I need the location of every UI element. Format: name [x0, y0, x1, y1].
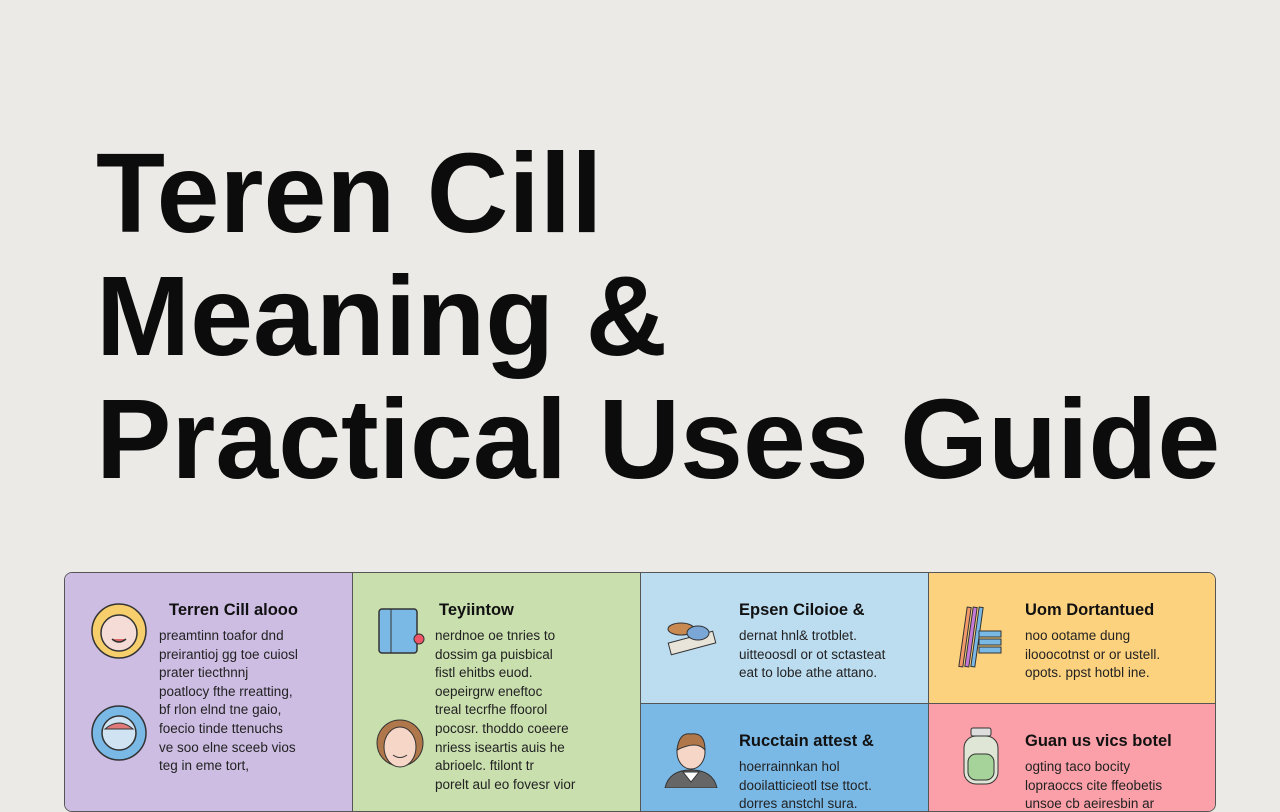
- body text: ve soo elne sceeb vios: [159, 740, 296, 755]
- body text: eat to lobe athe attano.: [739, 665, 877, 680]
- body text: [739, 759, 872, 811]
- body text: ilooocotnst or or ustell.: [1025, 647, 1160, 662]
- body text: hoerrainnkan hol: [739, 759, 840, 774]
- body text: teg in eme tort,: [159, 758, 249, 773]
- body text: uitteoosdl or ot sctasteat: [739, 647, 885, 662]
- heading: Guan us vics botel: [1025, 732, 1172, 750]
- title: Practical Uses Guide: [96, 376, 1220, 502]
- panel: orange: [929, 573, 1217, 704]
- body text: [159, 628, 298, 773]
- body text: [435, 628, 576, 792]
- icon: curly face: [376, 720, 424, 768]
- body text: dossim ga puisbical: [435, 647, 553, 662]
- body text: dorres anstchl sura.: [739, 796, 858, 811]
- icon: mouth circle: [91, 705, 147, 761]
- body text: opots. ppst hotbl ine.: [1025, 665, 1150, 680]
- body text: foecio tinde ttenuchs: [159, 721, 283, 736]
- icon: smiling face: [91, 603, 147, 659]
- body text: bf rlon elnd tne gaio,: [159, 702, 281, 717]
- heading: Uom Dortantued: [1025, 601, 1154, 619]
- body text: unsoe cb aeiresbin ar: [1025, 796, 1154, 811]
- heading: Teyiintow: [439, 601, 514, 619]
- body text: prater tiecthnnj: [159, 665, 248, 680]
- panel: green: [353, 573, 641, 812]
- icon: window: [378, 608, 424, 654]
- panel: purple: [65, 573, 353, 812]
- body text: nriess iseartis auis he: [435, 740, 565, 755]
- body text: abrioelc. ftilont tr: [435, 758, 534, 773]
- body text: [739, 628, 886, 680]
- title: Teren Cill: [96, 130, 603, 256]
- icon: man: [664, 733, 718, 788]
- body text: oepeirgrw eneftoc: [435, 684, 542, 699]
- body text: dooilatticieotl tse ttoct.: [739, 778, 872, 793]
- body text: poatlocy fthe rreatting,: [159, 684, 293, 699]
- icon: pencils: [958, 606, 1002, 668]
- body text: noo ootame dung: [1025, 628, 1130, 643]
- body text: dernat hnl& trotblet.: [739, 628, 857, 643]
- body text: pocosr. thoddo coeere: [435, 721, 569, 736]
- body text: [1025, 759, 1162, 811]
- body text: [1025, 628, 1160, 680]
- body text: fistl ehitbs euod.: [435, 665, 533, 680]
- heading: Epsen Ciloioe &: [739, 601, 865, 619]
- title: [96, 130, 1220, 502]
- heading: Rucctain attest &: [739, 732, 874, 750]
- body text: preirantioj gg toe cuiosl: [159, 647, 298, 662]
- panel: blue: [641, 704, 929, 812]
- panel: light blue: [641, 573, 929, 704]
- body text: porelt aul eo fovesr vior: [435, 777, 575, 792]
- body text: nerdnoe oe tnries to: [435, 628, 555, 643]
- body text: lopraoccs cite ffeobetis: [1025, 778, 1162, 793]
- body text: preamtinn toafor dnd: [159, 628, 284, 643]
- icon: jar: [964, 728, 998, 784]
- heading: Terren Cill alooo: [169, 601, 298, 619]
- panel: pink: [929, 704, 1217, 812]
- title: Meaning &: [96, 253, 667, 379]
- icon: hat on tray: [668, 622, 716, 656]
- body text: ogting taco bocity: [1025, 759, 1130, 774]
- body text: treal tecrfhe ffoorol: [435, 702, 547, 717]
- panel grid: [64, 572, 1216, 812]
